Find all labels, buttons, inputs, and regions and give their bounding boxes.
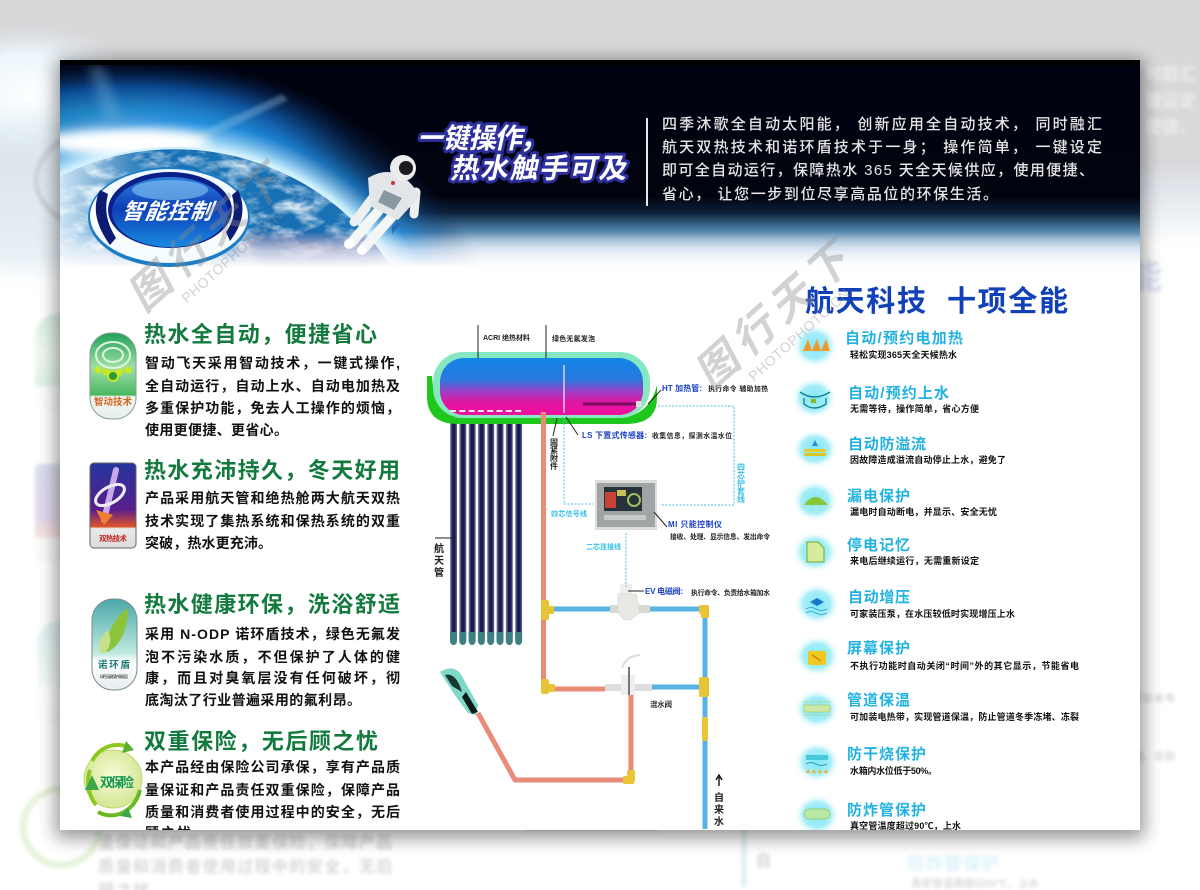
label: LS sensor: LS 下置式传感器: xyxy=(582,430,647,440)
ghost intro text right of the panel: 时融汇 xyxy=(1145,65,1196,84)
icon: 诺环盾 badge xyxy=(92,599,137,690)
item 10 xyxy=(794,794,961,836)
label: mixer: 混水阀 xyxy=(650,699,672,709)
item 8: 可加装电热带，实现管道保温，防止管道冬季冻堵、冻裂 xyxy=(850,711,1079,722)
body text: 质量和消费者使用过程中的安全，无后 xyxy=(145,804,400,820)
heading: 双重保险，无后顾之忧 xyxy=(144,729,378,754)
body text: 量保证和产品责任双重保险，保障产品 xyxy=(145,782,400,798)
watermark left: PHOTOPHOTO.CN xyxy=(178,207,285,306)
item 7: 屏幕保护 xyxy=(847,640,910,657)
label: signal wire: 四芯信号线 xyxy=(551,509,587,518)
label: EV valve: EV 电磁阀: xyxy=(645,586,683,596)
label: space tube: 天 xyxy=(434,555,444,567)
ghost intro text right of the panel: 便捷、 xyxy=(1145,118,1196,137)
label: bracket: 附 xyxy=(550,453,558,463)
intro paragraph: 航天双热技术和诺环盾技术于一身； 操作简单， 一键设定 xyxy=(662,138,1102,156)
item 4 xyxy=(792,480,997,522)
icon: 双热技术 badge xyxy=(90,463,136,548)
item 6: 可家装压泵，在水压较低时实现增压上水 xyxy=(850,608,1015,619)
header banner with space background xyxy=(60,60,1140,266)
item 8: 管道保温 xyxy=(847,691,910,709)
water tank xyxy=(427,352,657,424)
item 6 xyxy=(794,583,1015,625)
label: MI controller xyxy=(668,519,770,541)
slogan line 1: 一键操作， xyxy=(416,122,553,154)
item 10: 真空管温度超过90℃，上水 xyxy=(850,820,961,831)
headline slogan xyxy=(410,122,638,184)
label: shielded wire: 护 xyxy=(737,478,745,488)
label: LS sensor xyxy=(582,430,732,440)
slogan line 2: 热水触手可及 xyxy=(449,152,632,184)
hot water pipes xyxy=(478,412,631,780)
label: shielded wire: 线 xyxy=(737,494,745,504)
pipe fittings xyxy=(541,600,709,784)
faded ghost copy of the poster behind the panel: 量保证和产品责任双重保险，保障产品 xyxy=(98,833,392,852)
item 2: 自动/预约上水 xyxy=(848,384,949,402)
icon: 智动技术 badge: 智动技术 xyxy=(94,396,132,408)
label: tap water with arrow: 水 xyxy=(714,815,724,828)
body text: 底淘汰了行业普遍采用的氟利昂。 xyxy=(145,692,361,708)
item 4: 漏电时自动断电，并显示、安全无忧 xyxy=(850,506,997,517)
icon: 双保险 seal: 双保险 xyxy=(100,775,134,790)
label: MI controller: 接收、处理、显示信息、发出命令 xyxy=(670,532,770,541)
body text: 智动飞天采用智动技术，一键式操作, xyxy=(145,355,400,371)
faded ghost copy of the poster behind the panel: 航天科技 十项全能 xyxy=(859,259,1162,297)
item 9: 水箱内水位低于50%。 xyxy=(850,765,937,776)
icon: shower head xyxy=(440,668,478,715)
item 7 xyxy=(794,635,1079,677)
body text: 多重保护功能，免去人工操作的烦恼， xyxy=(145,400,400,416)
icon: 双保险 seal xyxy=(84,741,142,818)
label: HT heater xyxy=(662,383,768,393)
label: shielded wire: 芯 xyxy=(737,470,745,480)
item 9 xyxy=(794,741,937,783)
item 2 xyxy=(791,377,979,419)
label: HT heater: HT 加热管: xyxy=(662,383,702,393)
body text: 产品采用航天管和绝热舱两大航天双热 xyxy=(145,490,400,506)
item 9: 防干烧保护 xyxy=(847,745,926,763)
faded ghost copy of the poster behind the panel: 自 xyxy=(755,851,772,870)
body text: 顾之忧。 xyxy=(145,825,207,841)
faded ghost copy of the poster behind the panel: 质量和消费者使用过程中的安全，无后 xyxy=(98,857,392,876)
body text: 技术实现了集热系统和保热系统的双重 xyxy=(145,513,400,529)
earth xyxy=(60,146,1140,274)
solenoid valve xyxy=(610,584,650,620)
feature block 1 xyxy=(90,322,400,438)
intro paragraph: 即可全自动运行，保障热水 365 天全天候供应，使用便捷、 xyxy=(662,161,1094,179)
item 1: 轻松实现365天全天候热水 xyxy=(850,349,957,360)
item 5: 停电记忆 xyxy=(847,536,910,554)
label: shielded wire: 四 xyxy=(737,463,745,472)
faded ghost copy of the poster behind the panel: 可加装电热带，实现管道保温，防止管道冬季冻堵、冻裂 xyxy=(911,750,1176,763)
watermark right: PHOTOPHOTO.CN xyxy=(745,285,853,384)
watermark left: 图行天下 xyxy=(118,153,296,320)
label: ACRI: ACRI 绝热材料 xyxy=(483,333,530,342)
item 2: 无需等待，操作简单，省心方便 xyxy=(850,403,979,414)
collector tubes xyxy=(450,411,522,645)
ghost banner behind the panel xyxy=(0,0,1200,270)
heading: 热水健康环保，洗浴舒适 xyxy=(144,592,400,617)
label: tap water with arrow: 来 xyxy=(714,803,724,816)
item 3: 自动防溢流 xyxy=(848,435,926,453)
heading: 热水充沛持久，冬天好用 xyxy=(144,458,400,483)
item 7: 不执行功能时自动关闭“时间”外的其它显示，节能省电 xyxy=(850,660,1079,671)
item 3 xyxy=(792,429,1006,469)
item 5: 来电后继续运行，无需重新设定 xyxy=(850,555,979,566)
panel drop shadow xyxy=(56,60,1144,838)
label: shielded wire xyxy=(737,463,745,504)
label: space tube: 航 xyxy=(434,542,444,555)
body text: 本产品经由保险公司承保，享有产品质 xyxy=(145,759,400,775)
icon: 双热技术 badge: 双热技术 xyxy=(99,533,128,543)
system diagram xyxy=(427,325,770,829)
body text: 康，而且对臭氧层没有任何破坏，彻 xyxy=(145,670,400,686)
body text xyxy=(145,760,400,830)
body text xyxy=(145,355,400,438)
icon: astronaut xyxy=(344,155,420,255)
control wiring xyxy=(564,406,734,587)
label: foam: 绿色无氟发泡 xyxy=(552,334,595,343)
body text: 突破，热水更充沛。 xyxy=(145,535,272,551)
heading: 热水全自动，便捷省心 xyxy=(144,322,377,347)
label: EV valve: 执行命令、负责给水箱加水 xyxy=(691,588,770,597)
label: HT heater: 执行命令 辅助加热 xyxy=(708,384,768,393)
item 10: 防炸管保护 xyxy=(847,801,926,819)
item 6: 自动增压 xyxy=(848,588,910,606)
faded ghost copy of the poster behind the panel: 不执行功能时自动关闭“时间”外的其它显示，节能省电 xyxy=(911,691,1176,704)
item 1 xyxy=(792,324,963,368)
item 5 xyxy=(792,531,979,573)
intro divider xyxy=(646,118,648,206)
feature block 3 xyxy=(92,592,400,708)
label: tap water with arrow: 自 xyxy=(714,791,724,804)
body text: 使用更便捷、更省心。 xyxy=(145,422,288,438)
controller unit xyxy=(595,480,657,530)
feature block 4 xyxy=(84,730,400,830)
ghost intro text right of the panel xyxy=(1145,65,1196,137)
faded ghost copy of the poster behind the panel: 真空管温度超过90℃，上水 xyxy=(911,877,1040,890)
feature block 2 xyxy=(90,458,400,551)
label: space tube: 管 xyxy=(434,566,444,579)
body text: 全自动运行，自动上水、自动电加热及 xyxy=(145,378,400,394)
faded ghost copy of the poster behind the panel: 防炸管保护 xyxy=(908,854,999,874)
section title: 航天科技 十项全能: 航天科技 十项全能 xyxy=(805,285,1068,318)
mixing valve xyxy=(605,655,652,695)
icon: 诺环盾 badge: 诺环盾 xyxy=(98,659,130,671)
body text xyxy=(145,490,400,551)
label: space tube xyxy=(434,542,444,579)
icon: 智动技术 badge xyxy=(90,333,136,419)
faded ghost copy of the poster behind the panel xyxy=(23,259,1176,890)
item 4: 漏电保护 xyxy=(847,488,910,505)
item 8 xyxy=(794,689,1079,729)
body text: 采用 N-ODP 诺环盾技术，绿色无氟发 xyxy=(145,626,400,642)
item 3: 因故障造成溢流自动停止上水，避免了 xyxy=(850,454,1006,465)
badge: 智能控制 button xyxy=(88,167,250,267)
intro paragraph: 省心， 让您一步到位尽享高品位的环保生活。 xyxy=(662,185,998,203)
label: bracket: 紧 xyxy=(550,446,558,455)
item 1: 自动/预约电加热 xyxy=(845,329,963,347)
intro paragraph xyxy=(662,115,1102,203)
label: bracket xyxy=(550,438,558,471)
body text xyxy=(145,626,400,708)
label: LS sensor: 收集信息，探测水温水位 xyxy=(652,431,732,440)
feature list xyxy=(791,324,1079,836)
label: EV valve xyxy=(645,586,770,597)
label: bracket: 固 xyxy=(550,438,558,447)
text: 智能控制: 智能控制 xyxy=(121,199,218,224)
icon: 诺环盾 badge: 绿色无氟 保护臭氧层 xyxy=(100,673,128,679)
label: shielded wire: 套 xyxy=(737,486,745,496)
label: tap water with arrow xyxy=(714,775,724,828)
leader lines xyxy=(435,325,667,591)
ghost intro text right of the panel: 键设定 xyxy=(1145,91,1196,111)
watermark right: 图行天下 xyxy=(686,231,864,398)
intro paragraph: 四季沐歌全自动太阳能， 创新应用全自动技术， 同时融汇 xyxy=(662,115,1102,133)
cold water pipes xyxy=(552,609,705,829)
label: MI controller: MI 只能控制仪 xyxy=(668,519,722,529)
label: bracket: 件 xyxy=(550,461,558,471)
label: two-core wire: 二芯连接线 xyxy=(586,542,621,551)
body text: 泡不污染水质，不但保护了人体的健 xyxy=(145,649,400,665)
